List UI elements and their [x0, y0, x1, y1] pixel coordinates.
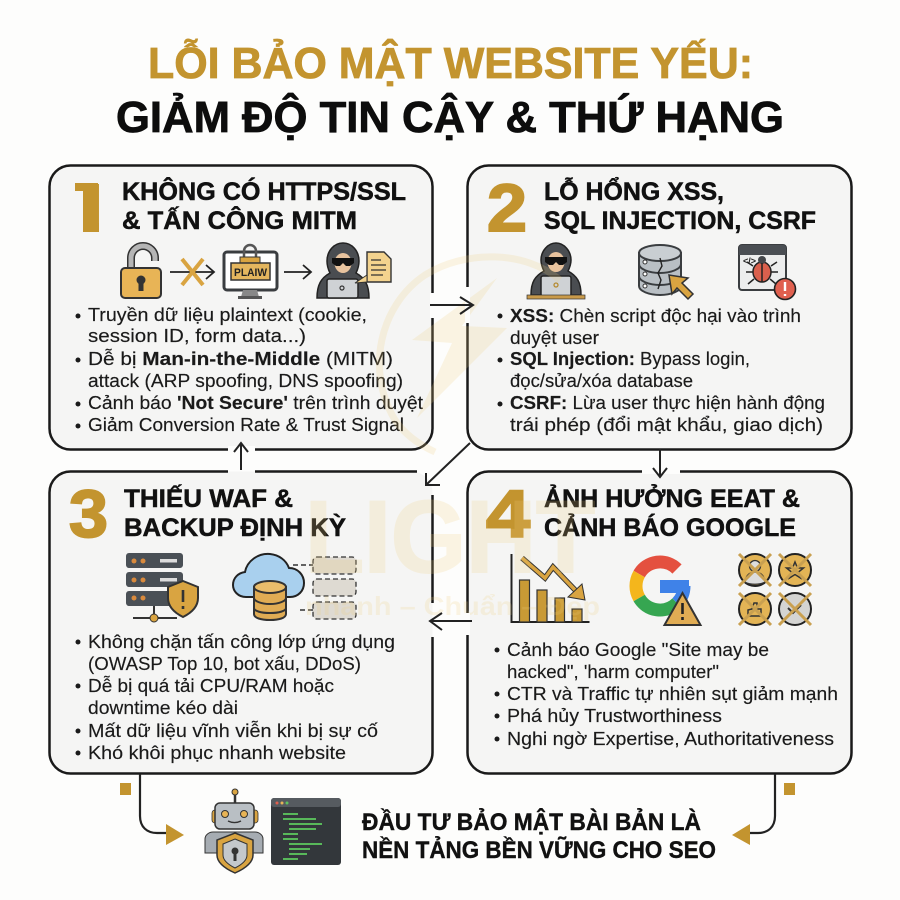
watermark: nhanh – Chuẩn – Đẹp: [305, 591, 600, 621]
heading 2: SQL INJECTION, CSRF: [544, 207, 816, 235]
bullet list 4: Phá hủy Trustworthiness: [507, 705, 722, 726]
icon: open padlock: [121, 246, 161, 298]
bullet list 3: (OWASP Top 10, bot xấu, DDoS): [88, 653, 361, 674]
icon: cracked database: [639, 245, 693, 299]
heading 1: KHÔNG CÓ HTTPS/SSL: [122, 176, 406, 206]
bullet list 3: [76, 631, 395, 763]
bullet list 1: [76, 304, 423, 435]
title: [116, 37, 784, 142]
icon: cloud backup database: [233, 554, 313, 620]
number 3: 3: [69, 477, 108, 552]
title: GIẢM ĐỘ TIN CẬY & THỨ HẠNG: [116, 91, 784, 142]
icon: monitor plaintext: PLAIW: [234, 267, 268, 279]
icon: code terminal: [271, 798, 341, 865]
footer message: NỀN TẢNG BỀN VỮNG CHO SEO: [362, 835, 716, 864]
arrow: panel 2 down to panel 4: [642, 449, 680, 477]
heading 2: LỖ HỔNG XSS,: [544, 176, 724, 206]
icon: hacker at laptop: [527, 243, 585, 299]
footer message: ĐẦU TƯ BẢO MẬT BÀI BẢN LÀ: [362, 807, 701, 836]
heading 4: CẢNH BÁO GOOGLE: [544, 512, 796, 542]
panel: 4 EEAT and Google warnings: [468, 472, 852, 774]
bullet list 2: [498, 305, 825, 435]
title: LỖI BẢO MẬT WEBSITE YẾU:: [148, 37, 753, 88]
bullet list 2: đọc/sửa/xóa database: [510, 370, 693, 391]
bullet list 1: Dễ bị Man-in-the-Middle (MITM): [88, 348, 393, 369]
arrow: panel 1 to panel 2: [430, 287, 473, 323]
watermark: [305, 257, 600, 621]
heading 3: BACKUP ĐỊNH KỲ: [124, 512, 346, 542]
bullet list 2: XSS: Chèn script độc hại vào trình: [510, 305, 801, 326]
number 1: 1: [56, 171, 118, 246]
number 1: [75, 183, 99, 232]
bullet list 3: Dễ bị quá tải CPU/RAM hoặc: [88, 675, 334, 696]
icon: browser bug alert: </>: [743, 256, 756, 266]
bullet list 3: Không chặn tấn công lớp ứng dụng: [88, 631, 395, 652]
bullet list 1: attack (ARP spoofing, DNS spoofing): [88, 370, 403, 391]
arrow: monitor to hacker: [284, 265, 311, 279]
bullet list 1: Cảnh báo 'Not Secure' trên trình duyệt: [88, 392, 423, 413]
icon: server with shield: [126, 553, 198, 622]
heading 2: [544, 176, 816, 235]
bullet list 4: Cảnh báo Google "Site may be: [507, 639, 769, 660]
bullet list 3: Mất dữ liệu vĩnh viễn khi bị sự cố: [88, 720, 378, 741]
icon: hacker with document: [317, 243, 391, 298]
heading 1: [122, 176, 406, 235]
bullet list 2: SQL Injection: Bypass login,: [510, 348, 750, 369]
icon: robot with shield: [205, 789, 263, 873]
icon: browser bug alert: [739, 245, 796, 300]
icon: Google G with warning: [636, 562, 700, 625]
bullet list 3: Khó khôi phục nhanh website: [88, 742, 346, 763]
bullet list 4: CTR và Traffic tự nhiên sụt giảm mạnh: [507, 683, 838, 704]
bullet list 2: CSRF: Lừa user thực hiện hành động: [510, 392, 825, 413]
connector: left to footer: [120, 774, 184, 845]
arrow: panel 2 diagonal to panel 3: [426, 443, 470, 485]
panel: 1 no HTTPS: [50, 166, 432, 450]
heading 4: [544, 483, 800, 542]
number 2: 2: [487, 171, 527, 246]
icon: monitor plaintext: [224, 245, 277, 299]
icon: falling bar chart: [512, 554, 590, 622]
heading 3: THIẾU WAF &: [124, 484, 293, 513]
bullet list 1: Giảm Conversion Rate & Trust Signal: [88, 414, 404, 435]
watermark: LIGHT: [305, 480, 595, 594]
bullet list 4: [494, 639, 838, 749]
footer message: [362, 807, 716, 864]
panel: 2 XSS SQLi CSRF: [468, 166, 852, 450]
icon: blocked arrow: [170, 259, 214, 285]
heading 1: & TẤN CÔNG MITM: [122, 205, 357, 235]
bullet list 2: trái phép (đổi mật khẩu, giao dịch): [510, 414, 823, 435]
icon: crossed trust badges: [739, 554, 811, 625]
arrow: panel 4 to panel 3: [430, 613, 472, 635]
bullet list 4: hacked", 'harm computer": [507, 661, 719, 682]
icon: dashed missing backups: [313, 557, 356, 619]
bullet list 4: Nghi ngờ Expertise, Authoritativeness: [507, 728, 834, 749]
connector: right to footer: [732, 774, 795, 845]
arrow: panel 3 up to panel 1: [228, 443, 255, 470]
bullet list 1: session ID, form data...): [88, 325, 306, 346]
number 4: 4: [486, 477, 530, 552]
panel: 3 no WAF: [50, 472, 432, 774]
heading 4: ẢNH HƯỞNG EEAT &: [544, 483, 800, 513]
heading 3: [124, 484, 346, 542]
bullet list 1: Truyền dữ liệu plaintext (cookie,: [88, 304, 367, 325]
bullet list 3: downtime kéo dài: [88, 697, 238, 718]
bullet list 2: duyệt user: [510, 327, 599, 348]
